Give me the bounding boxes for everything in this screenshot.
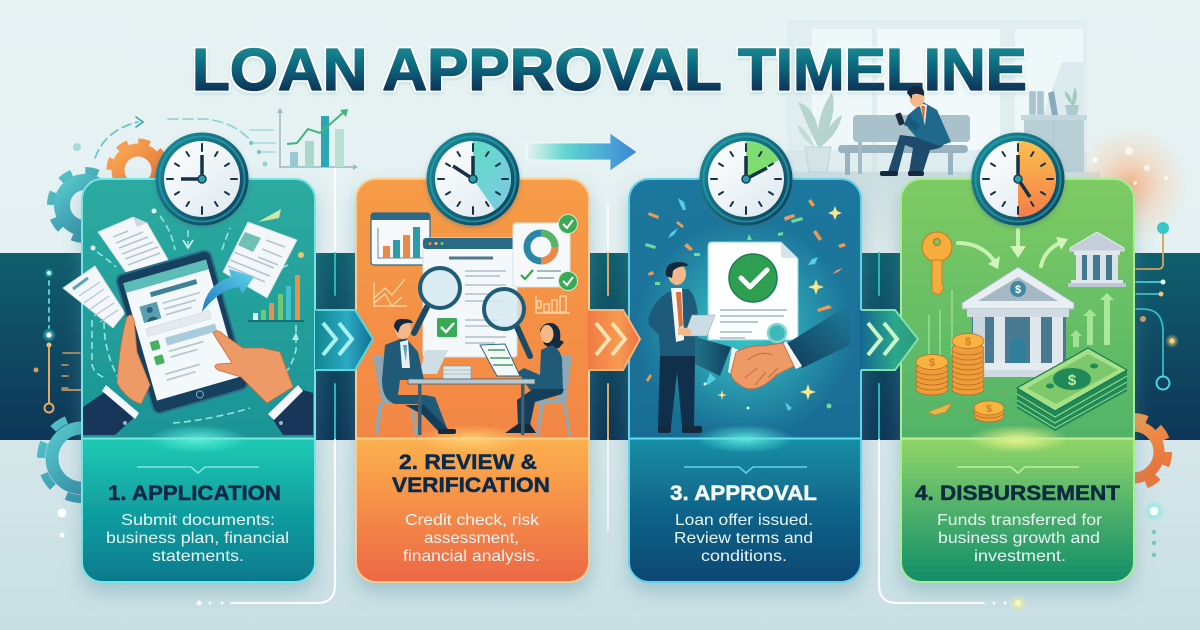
tablet [115,249,249,415]
paper 1 [98,217,170,275]
body text 3 [674,512,813,565]
magnifier 2 [484,289,530,356]
body text 4: Funds transferred for [937,512,1103,529]
light connector lines [231,168,984,603]
heading 3: 3. APPROVAL [670,482,817,505]
table items [420,344,520,379]
waiting room furniture [797,87,1087,175]
body text 3: Review terms and [674,530,813,547]
heading 2: VERIFICATION [392,474,550,497]
background band [0,253,1200,440]
heading 2: 2. REVIEW & [399,451,537,474]
clock 4 [972,132,1064,226]
body text 4: investment. [974,548,1066,565]
left hand [83,315,150,435]
bench [838,115,970,175]
panel: step 2 review and verification [356,132,589,582]
growth arrows [929,290,1114,360]
body text 4 [937,512,1103,565]
dashed flow marks [73,117,275,166]
clock 1 [156,132,248,226]
illustration: bank and funds [916,230,1127,431]
cash stack: $ [1068,372,1077,389]
heading 2 [392,451,550,497]
magnifier 1 [414,268,460,333]
body text 1 [106,512,289,565]
key [922,232,952,295]
illustration: review team [371,213,578,435]
woman reviewing [505,323,564,433]
background office window [780,20,1100,253]
coin single [928,392,1005,422]
heading 4: 4. DISBURSEMENT [915,482,1120,505]
chart window [371,213,430,265]
arrow: step 3 to 4 [860,310,918,370]
divider 1 [137,467,259,473]
body text 2: assessment, [424,530,519,547]
businessman [648,262,715,433]
small bars [536,295,570,313]
approval document [708,242,798,342]
coin stack small [916,354,948,395]
man on phone [880,86,951,176]
body text 1: Submit documents: [121,512,275,529]
footer dots [58,500,1165,612]
small line chart [374,279,407,306]
gear teal bottom-left [41,417,123,499]
gear teal left [51,171,119,239]
card 3 background [629,179,861,582]
flow lines [92,216,296,423]
divider 4 [957,467,1079,473]
paper 3 [223,222,297,298]
large bank [960,267,1076,377]
illustration: approval and handshake [645,198,850,433]
card 2 background [356,179,589,582]
clock 2 [426,132,520,226]
right circuit decoration [1136,222,1179,390]
confetti [645,198,846,411]
mini bars [248,275,304,321]
body text 2: financial analysis. [403,548,540,565]
handshake [695,304,850,389]
donut window [513,214,578,290]
cash stack [1017,348,1127,431]
man reviewing [382,319,456,434]
card 4 background [901,179,1134,582]
clock 3 [700,132,792,226]
panel: step 1 application [63,132,315,582]
right hand [213,331,313,435]
coin single: $ [986,404,992,415]
body text 2 [403,512,540,565]
table [408,379,535,435]
main document [423,238,517,357]
plant [797,92,842,172]
card 1 background [82,179,315,582]
chairs [373,356,572,435]
sparkles [717,206,842,400]
body text 3: Loan offer issued. [675,512,813,529]
coin stack tall: $ [965,336,971,348]
orange glow right [1072,127,1188,243]
body text 1: business plan, financial [106,530,289,547]
decorative growth chart [277,108,358,170]
illustration: documents and tablet [63,208,313,435]
large bank: $ [1015,284,1021,296]
gear orange bottom-right [1098,417,1168,487]
body text 4: business growth and [938,530,1100,547]
blue arrow [202,269,254,312]
small bank [1068,232,1126,287]
arrow: step 1 to 2 [315,310,373,370]
body text 3: conditions. [701,548,787,565]
flow arrows [958,230,1062,266]
panel: step 4 disbursement [901,132,1134,582]
divider 3 [684,467,807,473]
left circuit decoration [34,268,82,412]
body text 1: statements. [152,548,244,565]
top blue arrow [527,133,637,171]
body text 2: Credit check, risk [405,512,540,529]
paper 2 [63,266,125,328]
title: LOAN APPROVAL TIMELINE [192,37,1027,103]
cabinet and binders [1021,87,1087,172]
arrow: step 2 to 3 [588,310,640,370]
coin stack tall [952,334,984,395]
panel: step 3 approval [629,132,861,582]
coin stack small: $ [929,357,935,369]
heading 1: 1. APPLICATION [108,482,281,505]
gear orange top [110,142,166,198]
